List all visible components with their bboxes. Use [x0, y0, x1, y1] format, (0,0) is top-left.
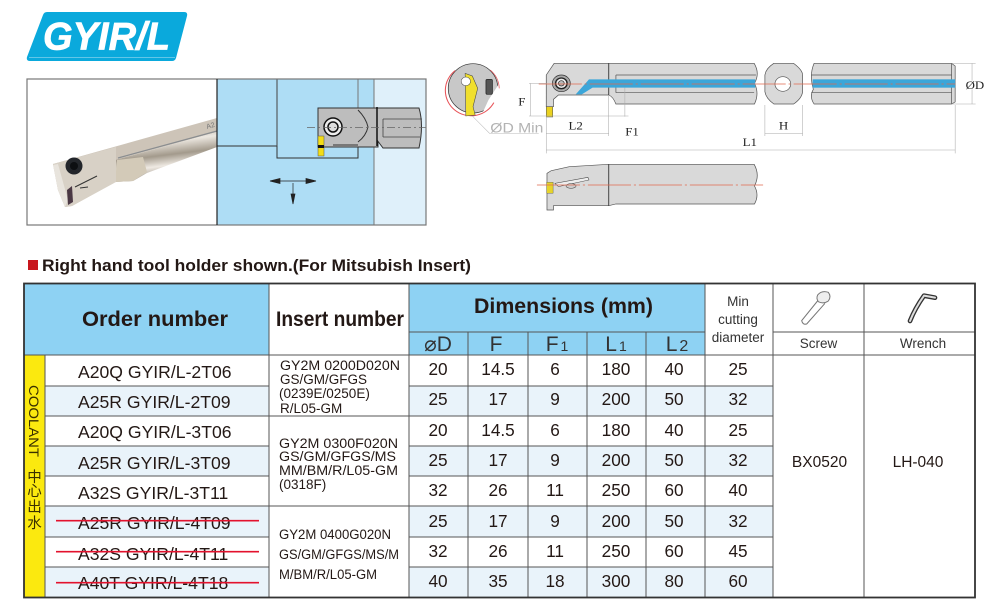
- dimension values: 25: [728, 359, 748, 379]
- dimension column heads: L1: [605, 333, 627, 356]
- screw and wrench codes: BX0520: [792, 454, 847, 471]
- tool labels: Wrench: [900, 336, 946, 351]
- dimension values: 40: [428, 571, 448, 591]
- min cutting diameter head: diameter: [712, 330, 765, 345]
- order numbers: [78, 362, 232, 593]
- main view: holder side: [546, 63, 757, 117]
- centre line: [539, 83, 955, 85]
- dimension values: 17: [488, 389, 508, 409]
- order numbers: A20Q GYIR/L-3T06: [78, 422, 232, 442]
- dimension column heads: L2: [666, 333, 688, 356]
- header labels: Insert number: [276, 308, 404, 331]
- tool photo: A2: [206, 122, 216, 131]
- dimension values: 40: [664, 359, 684, 379]
- insert numbers: GY2M 0300F020N: [279, 436, 398, 451]
- insert numbers: GS/GM/GFGS/MS: [279, 449, 396, 464]
- dimension values: 26: [488, 480, 508, 500]
- dimension labels: L1: [743, 135, 757, 149]
- dimension column heads: [424, 333, 688, 356]
- dimension labels: F1: [625, 125, 639, 138]
- dimension values: 11: [546, 541, 564, 561]
- dimension values: 9: [550, 511, 560, 531]
- dimension labels: F: [518, 95, 526, 109]
- dimension values: 17: [488, 511, 508, 531]
- dimension values: 200: [602, 389, 630, 409]
- logo: GYIR/L badge: GYIR/L: [43, 16, 170, 58]
- dimension values: 32: [728, 389, 748, 409]
- dimension values: 6: [550, 420, 560, 440]
- insert numbers: GY2M 0200D020N: [280, 358, 400, 373]
- dimension values: 6: [550, 359, 560, 379]
- insert numbers: (0318F): [279, 477, 326, 492]
- tool labels: [800, 336, 946, 351]
- dimension values: 18: [545, 571, 565, 591]
- insert numbers: (0239E/0250E): [279, 386, 370, 401]
- header labels: [82, 294, 653, 331]
- dimension values: 180: [602, 359, 630, 379]
- dimension values: 300: [602, 571, 630, 591]
- dimension values: 9: [550, 450, 560, 470]
- dimension values: 11: [546, 480, 564, 500]
- table backgrounds: [24, 284, 773, 598]
- order numbers: A25R GYIR/L-2T09: [78, 392, 231, 412]
- order numbers: A32S GYIR/L-3T11: [78, 483, 228, 503]
- coolant side label: 出: [27, 499, 42, 516]
- dimension values: 50: [664, 511, 684, 531]
- coolant side label: [26, 385, 42, 532]
- insert numbers: [279, 358, 400, 582]
- dimension values: 25: [728, 420, 748, 440]
- insert numbers: MM/BM/R/L05-GM: [279, 463, 398, 478]
- min cutting diameter head: [712, 294, 765, 345]
- coolant side label: 中: [27, 469, 42, 486]
- dimension values: 80: [664, 571, 684, 591]
- dimension labels: L2: [569, 119, 583, 132]
- section view: holder rear: [811, 63, 955, 104]
- label: minimum diameter: ØD Min: [490, 121, 543, 136]
- dimension labels: [518, 78, 984, 149]
- dimension values: 17: [488, 450, 508, 470]
- panel: tool photo and groove diagram: [27, 79, 426, 225]
- dimension values: 45: [728, 541, 748, 561]
- dimension column heads: F1: [546, 333, 569, 356]
- dimension values: 40: [664, 420, 684, 440]
- coolant side label: COOLANT: [26, 385, 42, 457]
- dimension values: 32: [728, 511, 748, 531]
- coolant side label: 水: [27, 515, 42, 532]
- dimension values: 25: [428, 511, 448, 531]
- coolant side label: 心: [27, 483, 42, 500]
- detail: insert close-up circle: [445, 64, 500, 117]
- dimension values: 25: [428, 389, 448, 409]
- note heading: Right hand tool holder shown.(For Mitsubish Insert): [42, 257, 471, 275]
- header labels: Dimensions (mm): [474, 294, 653, 318]
- dimension values: 250: [602, 541, 630, 561]
- dimension values: 200: [602, 511, 630, 531]
- dimension values: 50: [664, 450, 684, 470]
- table grid: [24, 284, 975, 598]
- technical drawing: dimensioned views: [445, 63, 984, 210]
- dimension values: 60: [664, 480, 684, 500]
- tool labels: Screw: [800, 336, 838, 351]
- lower view: holder top: [537, 164, 763, 210]
- dimension values: 25: [428, 450, 448, 470]
- end view: round section: [765, 63, 803, 104]
- header labels: Order number: [82, 308, 228, 331]
- groove diagram: [217, 79, 426, 225]
- arrows: feed directions: [270, 178, 316, 204]
- dimension labels: ØD: [966, 78, 984, 92]
- dimension values: 180: [602, 420, 630, 440]
- dimension values: 60: [664, 541, 684, 561]
- dimension values: 14.5: [481, 359, 515, 379]
- dimension values: [428, 359, 748, 591]
- order numbers: A32S GYIR/L-4T11: [78, 544, 228, 564]
- dimension values: 50: [664, 389, 684, 409]
- screw and wrench codes: [792, 454, 944, 471]
- dimension values: 32: [428, 480, 448, 500]
- icon: wrench: [910, 296, 935, 321]
- dimension values: 40: [728, 480, 748, 500]
- dimension values: 20: [428, 420, 448, 440]
- dimension values: 60: [728, 571, 748, 591]
- insert numbers: GY2M 0400G020N: [279, 527, 391, 542]
- order numbers: A25R GYIR/L-4T09: [78, 513, 231, 533]
- dimension values: 26: [488, 541, 508, 561]
- dimension values: 32: [728, 450, 748, 470]
- min cutting diameter head: Min: [727, 294, 749, 309]
- order numbers: A20Q GYIR/L-2T06: [78, 362, 232, 382]
- insert numbers: R/L05-GM: [280, 401, 342, 416]
- order numbers: A40T GYIR/L-4T18: [78, 573, 228, 593]
- dimension column heads: ⌀D: [424, 333, 452, 356]
- min cutting diameter head: cutting: [718, 312, 758, 327]
- insert numbers: M/BM/R/L05-GM: [279, 567, 377, 582]
- dimension column heads: F: [490, 333, 502, 356]
- dimension values: 250: [602, 480, 630, 500]
- dimension lines: [472, 63, 976, 153]
- insert numbers: GS/GM/GFGS/MS/M: [279, 547, 399, 562]
- dimension values: 9: [550, 389, 560, 409]
- table outer border: [24, 284, 975, 598]
- dimension values: 20: [428, 359, 448, 379]
- icon: screw: [802, 292, 830, 324]
- dimension values: 35: [488, 571, 508, 591]
- strike-through lines: [56, 521, 259, 583]
- dimension values: 32: [428, 541, 448, 561]
- dimension values: 14.5: [481, 420, 515, 440]
- screw and wrench codes: LH-040: [893, 454, 944, 471]
- order numbers: A25R GYIR/L-3T09: [78, 453, 231, 473]
- insert numbers: GS/GM/GFGS: [280, 372, 367, 387]
- dimension labels: H: [779, 119, 788, 132]
- tool photo: [27, 79, 217, 225]
- table: tool specifications: [24, 284, 975, 598]
- dimension values: 200: [602, 450, 630, 470]
